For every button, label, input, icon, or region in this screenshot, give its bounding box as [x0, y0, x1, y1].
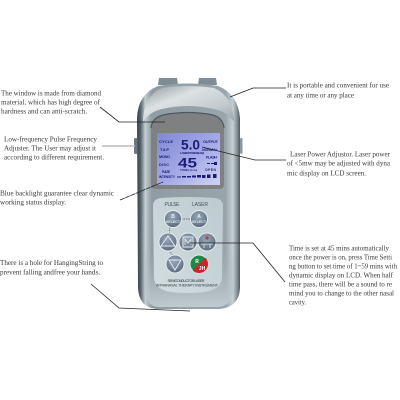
LCD right labels: NORMAL: [202, 148, 219, 152]
text: window material: material, which has high degree of: [1, 98, 100, 106]
LCD left labels: DISC: [159, 163, 169, 167]
LCD intensity bar: [177, 174, 216, 178]
text: hanging string hole: [0, 258, 103, 276]
leader line: laser power: [202, 147, 286, 160]
device: handheld laser unit: [134, 78, 242, 309]
top connector right: [198, 78, 217, 85]
text: time setting: Time is set at 45 mins automatically: [289, 244, 389, 252]
LCD left labels: MONO: [159, 155, 170, 159]
leader line: portable: [230, 88, 286, 97]
button: laser indicator: [198, 233, 216, 251]
LCD left labels: TAP: [160, 147, 169, 152]
lower body sheen: [145, 250, 233, 307]
LCD right labels: OPEN: [205, 168, 217, 172]
text: time setting: mind you to change to the other nasal: [289, 288, 394, 298]
panel product caption: SEMICONDUCTOR LASER: [168, 279, 205, 283]
text: hanging string hole: There is a hole for HangingString to: [0, 258, 103, 267]
text: window material: hardness and can anti-scratch.: [1, 106, 87, 116]
text: blue backlight: [0, 188, 115, 206]
LCD right labels: [202, 140, 219, 172]
button: power green and red: [190, 255, 208, 273]
leader line: backlight: [120, 182, 163, 200]
button: B select: [164, 210, 182, 228]
button: power green and red: JH: [199, 266, 206, 272]
panel product caption: [156, 279, 219, 288]
text: laser power adjustor: Laser Power Adjustor. Laser power: [290, 150, 390, 158]
text: pulse frequency adjuster: Low-frequency Pulse Frequency: [4, 134, 97, 144]
device body: [137, 84, 240, 309]
button: power green and red: R: [195, 259, 199, 265]
text: portable: It is portable and convenient for use: [287, 80, 390, 90]
button: A select: A: [197, 214, 201, 220]
text: pulse frequency adjuster: Adjuster. The User may adjust it: [4, 144, 97, 152]
button: B select: B: [171, 214, 175, 220]
text: portable: [287, 80, 390, 100]
text: time setting: cavity.: [289, 298, 306, 306]
LCD right labels: FLASH: [206, 156, 217, 160]
text: time setting: time pass, there will be a sound to re: [289, 280, 393, 288]
LCD time readout: 45: [178, 154, 197, 170]
text: window material: The window is made from diamond: [1, 88, 101, 98]
button: B select: SELECT: [166, 220, 181, 224]
text: blue backlight: working status display.: [0, 198, 66, 206]
keypad panel: [153, 197, 223, 293]
button: time setting: [179, 233, 197, 251]
text: pulse frequency adjuster: according to different requirement.: [4, 152, 104, 162]
text: portable: at any time or any place: [287, 90, 355, 100]
LCD left labels: [159, 139, 176, 179]
right side button: [240, 138, 242, 154]
text: time setting: dynamic display on LCD. When half: [289, 270, 393, 280]
leader line: pulse adjuster: [102, 145, 135, 147]
panel product caption: INTRANASAL THERAPY INSTRUMENT: [156, 284, 219, 288]
text: laser power adjustor: mic display on LCD screen.: [287, 168, 366, 178]
LCD left labels: INTENSITY: [159, 175, 176, 179]
button: down triangle: [166, 255, 184, 273]
left side button: [134, 138, 138, 154]
LCD time caption: TIME(min): [180, 168, 197, 172]
LCD screen: [157, 133, 220, 185]
text: hanging string hole: prevent falling andfree your hands.: [0, 268, 100, 276]
laser label: LASER: [192, 202, 208, 208]
text: window material: [1, 88, 101, 116]
LCD left labels: CYCLE: [159, 139, 173, 144]
pulse label: PULSE: [164, 202, 180, 208]
LCD left labels: PULSE: [162, 170, 170, 174]
bezel top shadow: [151, 112, 224, 128]
leader line: time setting: [190, 243, 285, 282]
LCD right labels: OUTPUT: [203, 140, 219, 144]
top shoulder highlight: [143, 86, 234, 122]
leader line: hanging hole: [91, 284, 190, 311]
connector lines between buttons: [169, 219, 191, 256]
text: laser power adjustor: [287, 150, 391, 178]
LCD laser power caption: LASER POWER(mW): [180, 151, 204, 155]
text: time setting: [289, 244, 397, 306]
button: up triangle: [159, 233, 177, 251]
button: A select: SELECT: [192, 220, 207, 224]
top connector left: [158, 78, 178, 85]
button: A select: [190, 210, 208, 228]
screen bezel: [151, 112, 224, 189]
text: laser power adjustor: of <5mw may be adjusted with dyna: [287, 158, 391, 168]
leader line: window: [100, 107, 165, 122]
text: blue backlight: Blue backlight guarantee clear dynamic: [0, 188, 115, 198]
LCD laser power readout: 5.0: [181, 136, 200, 152]
text: pulse frequency adjuster: [4, 134, 104, 162]
